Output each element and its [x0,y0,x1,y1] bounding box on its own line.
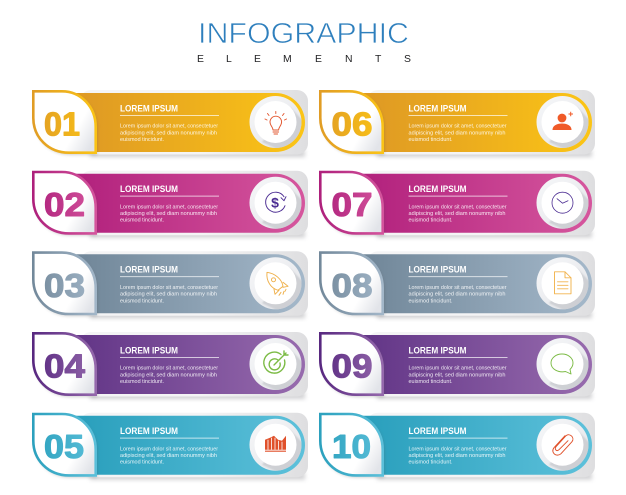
number 01: 01 [44,106,80,144]
panel: 06 [320,90,599,157]
icon: rocket [267,272,288,295]
number 05: 05 [44,429,84,466]
number 06: 06 [332,106,372,144]
number 02: 02 [44,187,85,224]
number 08: 08 [332,268,372,305]
panel: 04 [33,332,312,399]
icon: light bulb [265,112,286,134]
panel: 08 [320,251,599,318]
icon: document [554,272,571,294]
number 04: 04 [44,348,85,386]
panel: 10 [320,413,599,480]
panel: 05 [33,413,312,480]
panel: 02 [33,171,312,238]
icon: speech bubble [551,354,573,374]
subtitle: ELEMENTS [197,54,411,65]
panel: 07 [320,171,599,238]
icon: add user [552,112,573,130]
number 09: 09 [332,348,372,386]
panel: 09 [320,332,599,399]
number 03: 03 [44,268,85,305]
icon: dollar cycle: $ [271,195,279,211]
icon: dollar cycle [266,192,286,212]
icon: paperclip [553,435,573,455]
icon: clock [552,192,573,213]
panel: 01 [33,90,312,157]
icon: target [264,351,288,373]
number 07: 07 [332,187,372,224]
number 10: 10 [332,429,371,466]
title: INFOGRAPHIC [198,18,409,50]
icon: bar chart [265,436,286,451]
panel: 03 [33,251,312,318]
